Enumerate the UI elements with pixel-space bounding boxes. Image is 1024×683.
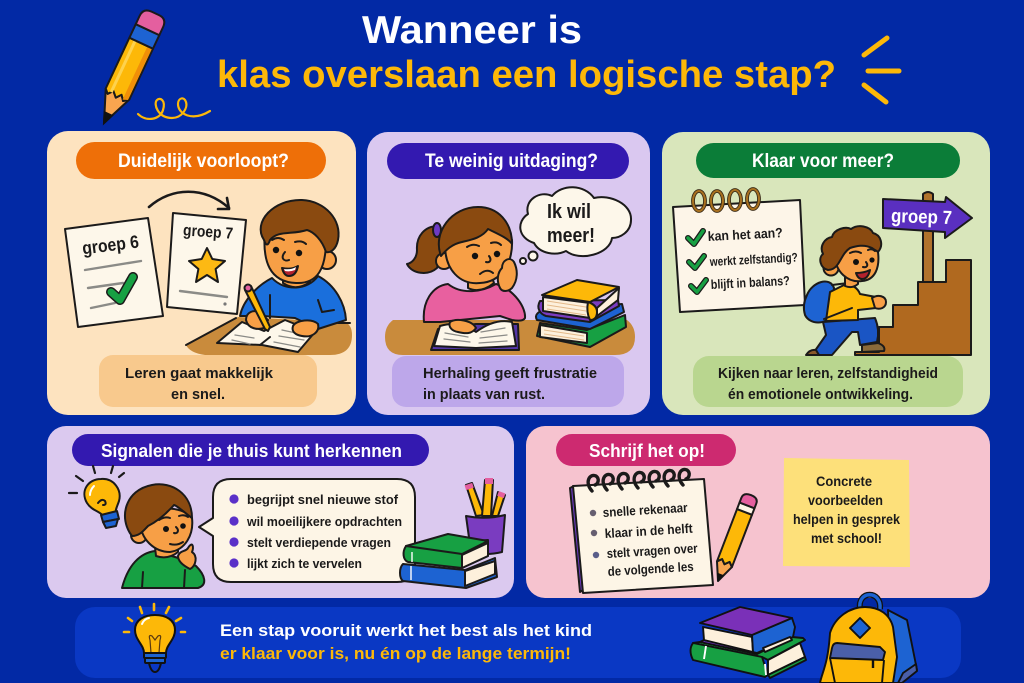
- notepad: snelle rekenaar: [602, 500, 688, 520]
- checklist note: [673, 189, 805, 312]
- paper: groep 7: [167, 213, 246, 314]
- notepad: klaar in de helft: [604, 521, 694, 541]
- illustration: thinking boy: [122, 484, 204, 588]
- icon: books on banner: [690, 607, 806, 678]
- illustration: boy writing: [186, 200, 352, 355]
- title: [217, 9, 836, 96]
- panel: klaar voor meer: [662, 132, 990, 415]
- title: Wanneer is: [362, 9, 582, 52]
- caption: herhaling geeft frustratie: in plaats van rust.: [423, 386, 545, 403]
- title: klas overslaan een logische stap?: [217, 54, 836, 96]
- panel: schrijf het op: [526, 426, 990, 598]
- speech bubble: signals: stelt verdiepende vragen: [247, 535, 391, 550]
- panel: duidelijk voorloopt: [47, 131, 356, 415]
- icon: light bulb yellow: [124, 604, 185, 672]
- banner text: Een stap vooruit werkt het best als het kind: [220, 622, 592, 640]
- banner text: er klaar voor is, nu én op de lange termijn!: [220, 645, 571, 663]
- thought bubble: ik wil meer: [520, 187, 631, 264]
- icon: sparks: [864, 38, 899, 102]
- arrow: to next group: [149, 192, 229, 209]
- heading pill: signalen: Signalen die je thuis kunt herkennen: [101, 440, 402, 461]
- signpost: groep 7: [883, 192, 972, 284]
- notepad: de volgende les: [607, 559, 694, 579]
- heading pill: klaar voor meer: [696, 143, 960, 178]
- thought bubble: ik wil meer: Ik wil: [547, 200, 591, 223]
- sticky note: met school!: [811, 531, 882, 546]
- panel: closing banner: [75, 595, 961, 683]
- speech bubble: signals: lijkt zich te vervelen: [247, 556, 362, 571]
- icon: pencil small: [711, 492, 758, 584]
- caption: leren gaat makkelijk: Leren gaat makkelijk: [125, 365, 274, 382]
- caption: leren gaat makkelijk: en snel.: [171, 386, 225, 403]
- icon: backpack: [820, 595, 917, 683]
- heading pill: duidelijk voorloopt: [76, 142, 326, 179]
- heading pill: klaar voor meer: Klaar voor meer?: [752, 151, 894, 172]
- sticky note: helpen in gesprek: [793, 512, 900, 527]
- stairs: [855, 260, 971, 355]
- icon: light bulb: [69, 466, 124, 528]
- heading pill: schrijf het op: Schrijf het op!: [589, 440, 705, 461]
- thought bubble: ik wil meer: meer!: [547, 224, 595, 247]
- banner text: [220, 622, 592, 663]
- caption: kijken naar leren: én emotionele ontwikkeling.: [728, 386, 913, 403]
- illustration: boy climbing stairs: [804, 226, 886, 355]
- caption: kijken naar leren: [693, 356, 963, 407]
- caption: leren gaat makkelijk: [99, 355, 317, 407]
- icon: pencil: [92, 8, 167, 128]
- heading pill: schrijf het op: [556, 434, 736, 466]
- heading pill: te weinig uitdaging: Te weinig uitdaging?: [425, 151, 598, 172]
- heading pill: te weinig uitdaging: [387, 143, 629, 179]
- caption: kijken naar leren: Kijken naar leren, zelfstandigheid: [718, 365, 938, 382]
- icon: two books: [400, 534, 497, 588]
- icon: pencil cup: [465, 478, 505, 554]
- speech bubble: signals: begrijpt snel nieuwe stof: [247, 492, 399, 507]
- sticky note: [783, 458, 910, 567]
- notepad: stelt vragen over: [606, 540, 698, 561]
- illustration: girl thinking: [407, 207, 525, 350]
- speech bubble: signals: wil moeilijkere opdrachten: [246, 514, 402, 529]
- signpost: groep 7: groep 7: [891, 206, 952, 229]
- heading pill: signalen: [72, 434, 429, 466]
- icon: scribble: [138, 98, 210, 119]
- sticky note: Concrete: [816, 474, 872, 489]
- paper: groep 7: groep 7: [183, 222, 234, 243]
- icon: stack of books: [536, 280, 626, 347]
- checklist note: kan het aan?: [707, 225, 783, 244]
- desk: [385, 320, 635, 355]
- heading pill: duidelijk voorloopt: Duidelijk voorloopt?: [118, 151, 289, 172]
- panel: signalen: [47, 426, 514, 598]
- sticky note: voorbeelden: [808, 493, 883, 508]
- caption: herhaling geeft frustratie: Herhaling geeft frustratie: [423, 365, 597, 382]
- paper: groep 6: groep 6: [81, 232, 140, 258]
- speech bubble: signals: [199, 479, 415, 582]
- paper: groep 6: [65, 218, 163, 327]
- panel: te weinig uitdaging: [367, 132, 650, 415]
- notepad: [570, 469, 713, 593]
- caption: herhaling geeft frustratie: [392, 356, 624, 407]
- checklist note: blijft in balans?: [710, 273, 790, 292]
- checklist note: werkt zelfstandig?: [709, 250, 798, 269]
